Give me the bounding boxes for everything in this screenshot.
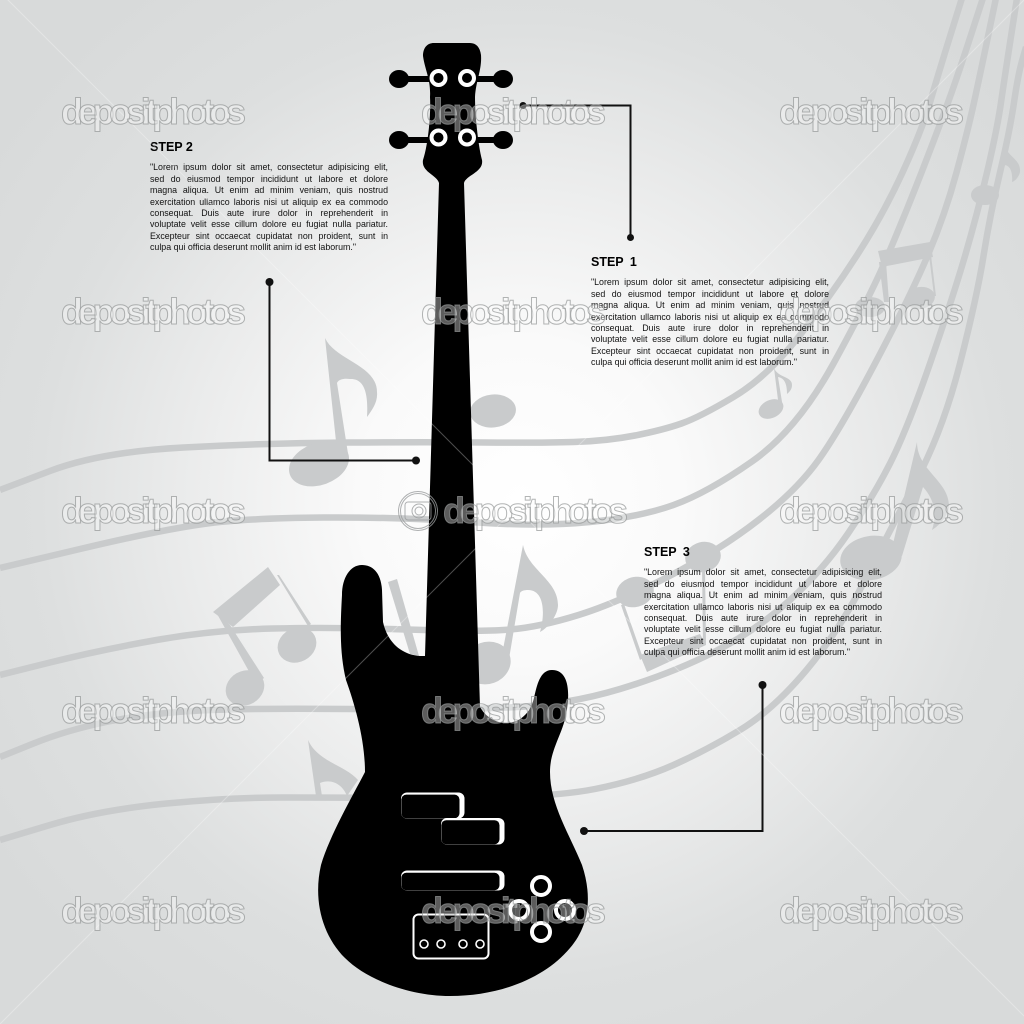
tuning pegs xyxy=(389,70,513,149)
leader: step 3 xyxy=(580,681,766,835)
text: magna aliqua. Ut enim ad minim veniam, quis nostrud xyxy=(150,185,388,195)
text: magna aliqua. Ut enim ad minim veniam, quis nostrud xyxy=(644,590,882,600)
note: flag note lower left xyxy=(308,740,358,796)
text: "Lorem ipsum dolor sit amet, consectetur adipisicing elit, xyxy=(644,567,882,577)
watermark camera logo xyxy=(398,492,438,530)
note: beamed notes on the left xyxy=(213,567,323,713)
text block: step 2: STEP 2 xyxy=(150,140,193,154)
note: beamed notes behind step 3 xyxy=(613,538,724,672)
text: magna aliqua. Ut enim ad minim veniam, quis nostrud xyxy=(591,300,829,310)
pickup 3 xyxy=(401,870,504,890)
text: "Lorem ipsum dolor sit amet, consectetur adipisicing elit, xyxy=(591,277,829,287)
text: exercitation ullamco laboris nisi ut aliquip ex ea commodo xyxy=(644,602,882,612)
note: beamed notes upper right xyxy=(855,242,937,317)
note: stem behind guitar horn xyxy=(388,579,419,656)
watermark text grid: depositphotos xyxy=(443,490,628,531)
text: exercitation ullamco laboris nisi ut aliquip ex ea commodo xyxy=(591,312,829,322)
leader: step 2 xyxy=(266,278,420,464)
text: sed do eiusmod tempor incididunt ut labore et dolore xyxy=(644,579,882,589)
pickup 1 xyxy=(401,792,464,818)
text: culpa qui officia deserunt mollit anim id est laborum." xyxy=(150,242,356,252)
text: voluptate velit esse cillum dolore eu fugiat nulla pariatur. xyxy=(644,624,882,634)
watermark text grid: depositphotos xyxy=(61,890,246,931)
watermark text grid: depositphotos xyxy=(421,890,606,931)
watermark text grid: depositphotos xyxy=(61,690,246,731)
watermark text grid: depositphotos xyxy=(779,890,964,931)
text: consequat. Duis aute irure dolor in reprehenderit in xyxy=(591,323,829,333)
text: Excepteur sint occaecat cupidatat non proident, sunt in xyxy=(644,636,882,646)
text block: step 3 xyxy=(644,545,882,657)
note: large eighth note left of neck xyxy=(283,338,377,494)
note: small eighth note right xyxy=(755,368,792,423)
text: "Lorem ipsum dolor sit amet, consectetur adipisicing elit, xyxy=(150,162,388,172)
bridge xyxy=(414,914,488,958)
note: oval note head near neck xyxy=(468,392,518,430)
leader: step 1 xyxy=(520,102,634,241)
watermark text grid: depositphotos xyxy=(779,490,964,531)
text: culpa qui officia deserunt mollit anim id est laborum." xyxy=(591,357,797,367)
watermark text grid: depositphotos xyxy=(779,690,964,731)
text: exercitation ullamco laboris nisi ut aliquip ex ea commodo xyxy=(150,197,388,207)
text: Excepteur sint occaecat cupidatat non proident, sunt in xyxy=(150,231,388,241)
pickup 2 xyxy=(441,818,504,844)
text: sed do eiusmod tempor incididunt ut labore et dolore xyxy=(591,289,829,299)
text block: step 2 xyxy=(150,140,388,252)
text: Excepteur sint occaecat cupidatat non proident, sunt in xyxy=(591,346,829,356)
tuner rings xyxy=(432,71,474,144)
text: voluptate velit esse cillum dolore eu fugiat nulla pariatur. xyxy=(150,219,388,229)
watermark text grid xyxy=(61,91,964,931)
text: voluptate velit esse cillum dolore eu fugiat nulla pariatur. xyxy=(591,334,829,344)
text: consequat. Duis aute irure dolor in reprehenderit in xyxy=(644,613,882,623)
watermark text grid: depositphotos xyxy=(421,690,606,731)
note: eighth note right of neck xyxy=(457,545,558,691)
text: culpa qui officia deserunt mollit anim id est laborum." xyxy=(644,647,850,657)
text: sed do eiusmod tempor incididunt ut labore et dolore xyxy=(150,174,388,184)
watermark text grid: depositphotos xyxy=(779,291,964,332)
watermark text grid: depositphotos xyxy=(61,291,246,332)
text: consequat. Duis aute irure dolor in reprehenderit in xyxy=(150,208,388,218)
text block: step 1: STEP 1 xyxy=(591,255,637,269)
note: eighth note top right xyxy=(971,147,1020,205)
watermark text grid: depositphotos xyxy=(779,91,964,132)
text block: step 1 xyxy=(591,255,829,367)
control knobs xyxy=(510,877,574,941)
guitar silhouette xyxy=(318,43,588,996)
watermark text grid: depositphotos xyxy=(61,490,246,531)
watermark text grid: depositphotos xyxy=(61,91,246,132)
text block: step 3: STEP 3 xyxy=(644,545,690,559)
note: large eighth note right xyxy=(837,442,949,585)
watermark text grid: depositphotos xyxy=(421,91,606,132)
watermark text grid: depositphotos xyxy=(421,291,606,332)
